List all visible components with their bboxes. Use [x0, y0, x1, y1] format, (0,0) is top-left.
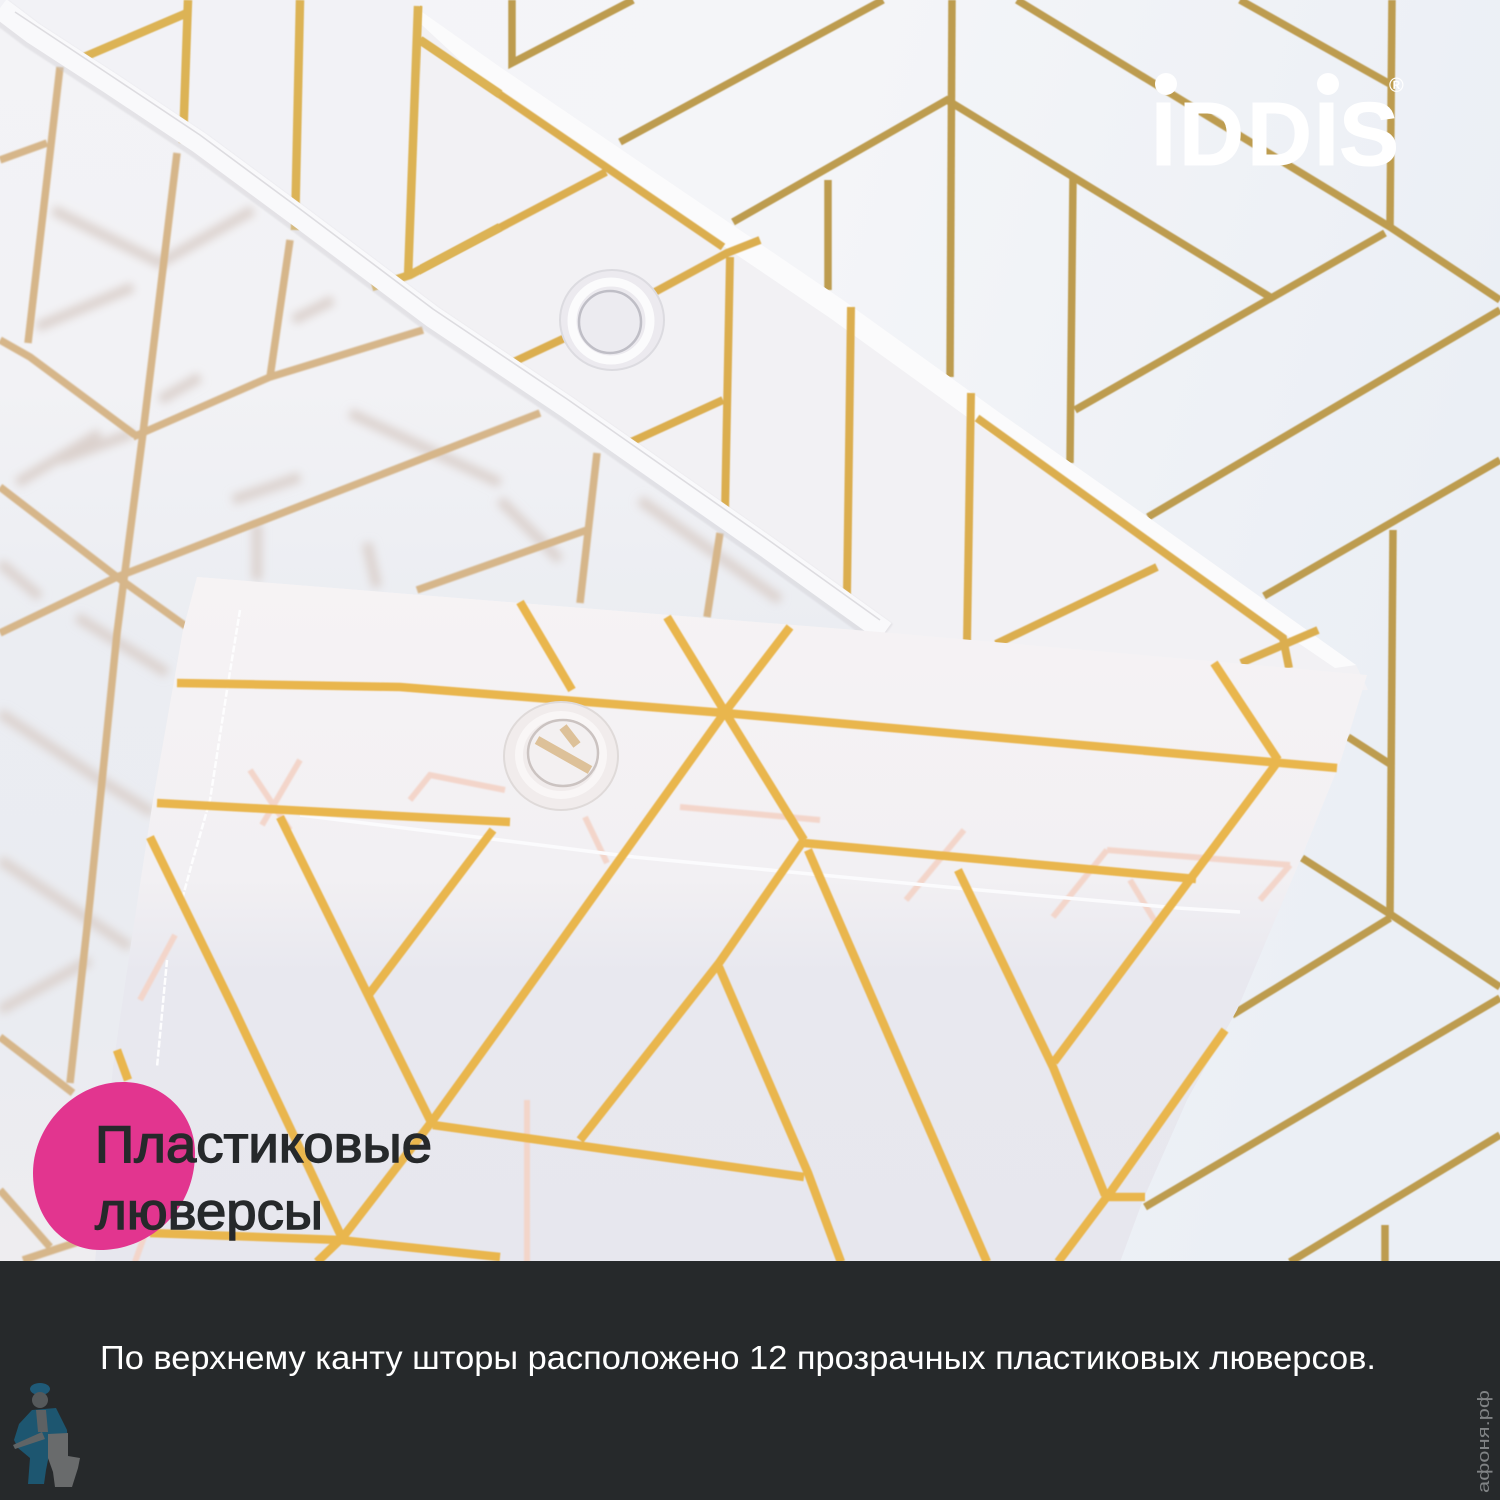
icon: upper grommet	[560, 270, 664, 370]
icon: plumber with toilet	[13, 1383, 80, 1487]
faint rear-layer lines	[0, 210, 780, 1010]
panel: diagonal hem	[0, 8, 885, 635]
faint show-through pattern	[135, 760, 1290, 1262]
logo: IDDIS: ®	[1389, 75, 1404, 97]
heading: люверсы	[95, 1183, 323, 1241]
description text: По верхнему канту шторы расположено 12 прозрачных пластиковых люверсов.	[100, 1339, 1376, 1376]
panel: upper-left curtain corner	[0, 0, 500, 296]
panel: translucent curtain under hem	[0, 8, 880, 1262]
hem stitching	[157, 610, 1240, 1067]
pink blob accent	[33, 1082, 195, 1250]
heading: Пластиковые	[95, 1116, 432, 1174]
heading	[95, 1116, 432, 1241]
watermark: vertical site name: афоня.рф	[1475, 1390, 1493, 1493]
panel: front curtain flap	[95, 577, 1367, 1262]
translucent gold lines	[0, 67, 720, 1260]
panel: dark footer	[0, 1261, 1500, 1500]
logo: IDDIS: IDDIS	[1151, 85, 1399, 185]
icon: lower grommet	[504, 702, 618, 810]
panel: middle curtain flap	[100, 0, 1368, 700]
gold lines	[117, 602, 1337, 1262]
